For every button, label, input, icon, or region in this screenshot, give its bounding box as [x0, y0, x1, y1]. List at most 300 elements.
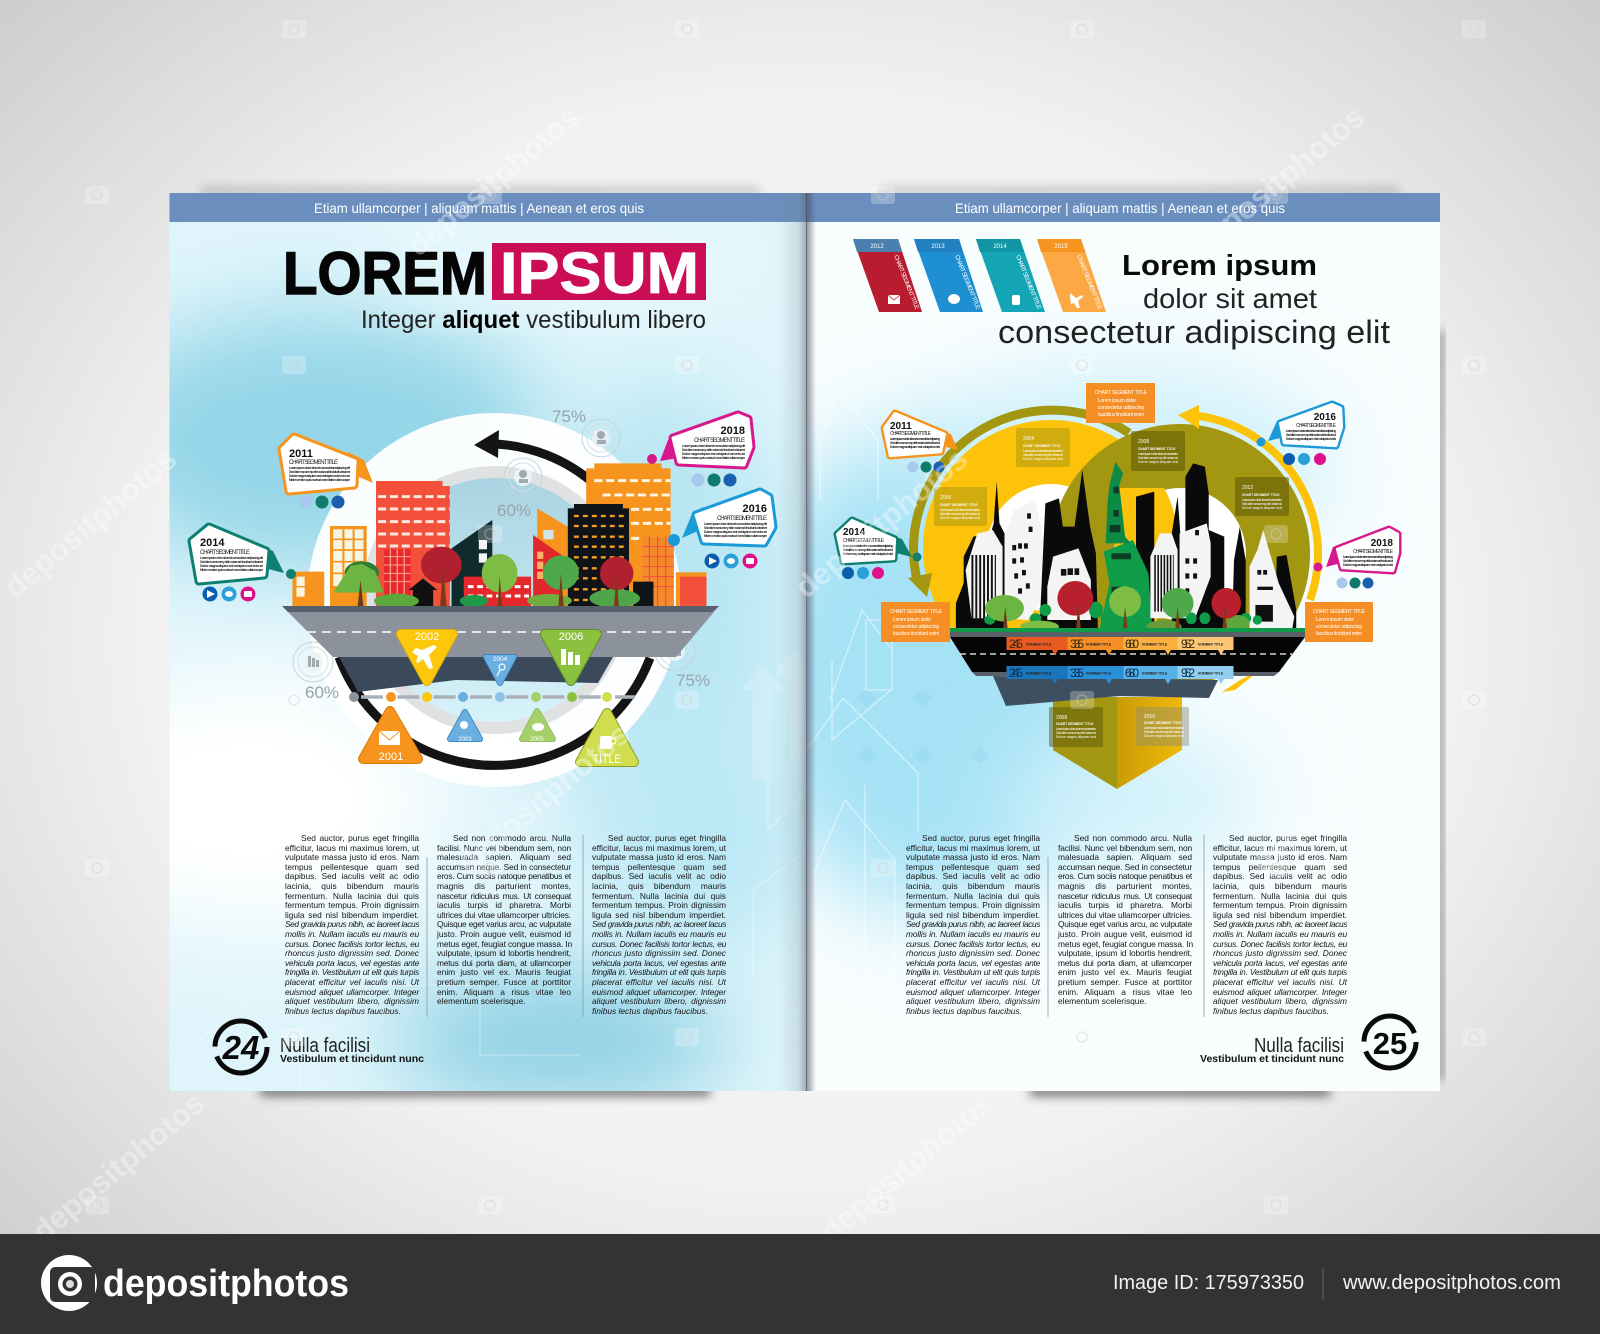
- box 2012: [1235, 477, 1289, 516]
- watermarks: depositphotos: [788, 441, 974, 605]
- spine shading: [778, 193, 816, 1091]
- number bar blue: 680: [1125, 666, 1139, 680]
- column 3: rhoncus justo dignissim sed. Donec: [1213, 948, 1347, 958]
- column 1: aliquet vestibulum libero, dignissim: [906, 996, 1040, 1006]
- tab 2012: [853, 239, 922, 312]
- right page heading: [998, 250, 1390, 350]
- orange box top: consectetur adipiscing: [1098, 405, 1144, 411]
- olive arrow arc: [908, 410, 1129, 597]
- column 2: ultrices dui vitae ullamcorper ultricies.: [437, 910, 571, 920]
- column 2: justo. Proin augue velit, euismod id: [437, 929, 571, 939]
- column 1: lacinia, quis bibendum mauris: [906, 881, 1040, 891]
- left infographic: city on circular timeline: [282, 407, 719, 787]
- column 3: mollis in. Nullam iaculis eu mauris eu: [592, 929, 726, 939]
- column 1: [906, 834, 1040, 1024]
- callout 2011 left: 2011: [289, 448, 313, 460]
- right page heading: dolor sit amet: [1143, 283, 1317, 314]
- box 2008 bottom: Sed diam nonummy nibh euismod: [1056, 731, 1096, 735]
- icons 2014 right: [842, 567, 884, 579]
- image id: Image ID: 175973350: [1113, 1272, 1304, 1294]
- callout 2014 right: CHART SEGMENT TITLE: [843, 538, 885, 544]
- orange box left: [881, 602, 950, 642]
- page number 25: [1364, 1016, 1416, 1068]
- percent labels: 60%: [497, 501, 531, 520]
- column 2: enim. Aliquam a risus vitae leo: [437, 986, 571, 996]
- box 2006: Sed diam nonummy nibh euismod: [940, 512, 980, 516]
- box 2010: Dolore magna aliquam erat: [1144, 734, 1184, 738]
- column 2: enim justo vel ex. Mauris feugiat: [1058, 967, 1192, 977]
- callout 2016 left: 2016: [743, 503, 767, 515]
- tab 2015: 2015: [1054, 244, 1068, 250]
- column 3: vulputate massa justo id eros. Nam: [592, 852, 726, 862]
- box 2004: Lorem ipsum dolor sit amet consectetur: [1023, 449, 1064, 453]
- column 3: cursus. Donec facilisis tortor lectus, eu: [1213, 939, 1347, 949]
- box 2008 bottom: CHART SEGMENT TITLE: [1056, 722, 1094, 726]
- number bar blue: [1006, 666, 1234, 684]
- box 2012: Sed diam nonummy nibh euismod: [1242, 502, 1282, 506]
- box 2004: CHART SEGMENT TITLE: [1023, 444, 1061, 448]
- callout 2016 left: [668, 492, 773, 546]
- column 3: efficitur, lacus mi maximus lorem, ut: [592, 843, 726, 853]
- column 1: placerat efficitur vel iaculis nisi. Ut: [906, 977, 1040, 987]
- footer text right: Nulla facilisi: [1254, 1035, 1344, 1057]
- callout 2016 right: Sed diam nonummy nibh euismod tincidunt ut: [1286, 433, 1337, 437]
- box 2012: Dolore magna aliquam erat: [1242, 506, 1282, 510]
- column 3: aliquet vestibulum libero, dignissim: [1213, 996, 1347, 1006]
- column 3: ligula sed nisl bibendum imperdiet.: [592, 910, 726, 920]
- callout 2011 right: 2011: [890, 421, 912, 432]
- column 3: finibus lectus dapibus faucibus.: [592, 1006, 708, 1016]
- callout 2011 right: Dolore magna aliquam erat volutpat ut wisi: [890, 445, 940, 449]
- column 3: fringilla in. Vestibulum ut elit quis turpis: [592, 967, 726, 977]
- marker title: TITLE: [592, 752, 622, 766]
- number bar blue: NUMBER TITLE: [1142, 672, 1168, 676]
- footer text right: Vestibulum et tincidunt nunc: [1200, 1053, 1344, 1065]
- column 2: vulputate, ipsum id lobortis hendrerit,: [1058, 948, 1192, 958]
- column 2: facilisi. Nunc vel bibendum sem, non: [1058, 843, 1192, 853]
- watermarks: depositphotos: [813, 1085, 999, 1249]
- callout 2018 left: CHART SEGMENT TITLE: [694, 438, 745, 444]
- header bar left: [170, 193, 807, 222]
- callout 2014 left: [192, 527, 296, 581]
- inner grey ring: [367, 472, 623, 728]
- column 1: fermentum tempus. Proin dignissim: [906, 900, 1040, 910]
- icons 2011 right: [908, 462, 944, 472]
- marker 2006: 2006: [559, 631, 583, 643]
- callout 2011 right: CHART SEGMENT TITLE: [890, 431, 932, 437]
- callout 2018 left: [647, 415, 751, 465]
- number bar orange: NUMBER TITLE: [1086, 642, 1112, 646]
- column 2: metus eget, feugiat congue massa. In: [437, 939, 572, 949]
- column 1: lacinia, quis bibendum mauris: [285, 881, 419, 891]
- callout 2011 right: [884, 413, 958, 456]
- icons 2011 left: [300, 496, 344, 508]
- column 3: fermentum. Nulla lacinia dui quis: [1213, 891, 1347, 901]
- road black: [950, 628, 1305, 676]
- marker 2005: 2005: [530, 737, 544, 743]
- page number 24: [215, 1021, 267, 1073]
- yellow ring overlap: [1114, 488, 1175, 622]
- column 3: ligula sed nisl bibendum imperdiet.: [1213, 910, 1347, 920]
- box 2004: 2004: [1023, 436, 1034, 442]
- box 2004: Sed diam nonummy nibh euismod: [1023, 453, 1063, 457]
- column 3: vehicula porta lacus, vel egestas ante: [1213, 958, 1347, 968]
- icons 2016 left: [704, 554, 758, 568]
- column 3: euismod aliquet ullamcorper. Integer: [1213, 986, 1347, 996]
- column 3: [592, 834, 726, 1024]
- column 1: mollis in. Nullam iaculis eu mauris eu: [906, 929, 1040, 939]
- column 2: [437, 834, 571, 1024]
- footer text right: [1200, 1035, 1344, 1065]
- tab 2013: [914, 239, 983, 312]
- column 3: fermentum. Nulla lacinia dui quis: [592, 891, 726, 901]
- column 2: iaculis turpis id pharetra. Morbi: [1058, 900, 1192, 910]
- callout 2016 left: Lorem ipsum dolor sit amet consectetur adipiscing elit: [704, 522, 768, 526]
- title: lorem ipsum: IPSUM: [500, 241, 699, 306]
- number bar orange: NUMBER TITLE: [1198, 642, 1224, 646]
- column 1: Sed auctor, purus eget fringilla: [301, 833, 419, 843]
- yellow arrow arc: [1178, 405, 1318, 692]
- callout 2014 left: Sed diam nonummy nibh euismod tincidunt ut laoreet: [200, 560, 264, 564]
- column 1: Sed gravida purus nibh, ac laoreet lacus: [906, 919, 1040, 929]
- box 2008 top: [1131, 431, 1185, 471]
- column 1: ligula sed nisl bibendum imperdiet.: [285, 910, 419, 920]
- orange box top: [1086, 383, 1155, 423]
- logo wordmark: depositphotos: [103, 1263, 349, 1305]
- trees: [335, 547, 640, 608]
- column 3: dapibus. Sed iaculis velit ac odio: [592, 871, 726, 881]
- column 1: finibus lectus dapibus faucibus.: [285, 1006, 401, 1016]
- box 2010: Lorem ipsum dolor sit amet consectetur: [1144, 726, 1185, 730]
- column 3: fermentum tempus. Proin dignissim: [592, 900, 726, 910]
- column 1: tempus pellentesque quam sed: [906, 862, 1040, 872]
- marker 2006: [545, 631, 597, 681]
- callout 2011 right: Sed diam nonummy nibh euismod tincidunt ut: [890, 441, 941, 445]
- box 2006: 2006: [940, 495, 951, 501]
- icons 2016 right: [1283, 453, 1326, 465]
- column 3: placerat efficitur vel iaculis nisi. Ut: [1213, 977, 1347, 987]
- column 1: dapibus. Sed iaculis velit ac odio: [906, 871, 1040, 881]
- number bar orange: 335: [1070, 637, 1084, 651]
- tab 2012: 2012: [870, 244, 884, 250]
- number bar orange: 680: [1125, 637, 1139, 651]
- ring holes: [985, 482, 1248, 622]
- logo mark: [41, 1255, 97, 1311]
- column 2: accumsan neque. Sed in consectetur: [437, 862, 571, 872]
- orange box right: CHART SEGMENT TITLE: [1313, 609, 1366, 615]
- column 3: Sed auctor, purus eget fringilla: [1229, 833, 1347, 843]
- column 3: fringilla in. Vestibulum ut elit quis turpis: [1213, 967, 1347, 977]
- title: lorem ipsum: [283, 240, 706, 307]
- callout 2018 left: Dolore magna aliquam erat volutpat ut wisi enim ad: [682, 452, 745, 456]
- callout 2018 right: Sed diam nonummy nibh euismod tincidunt ut: [1343, 559, 1394, 563]
- column 3: dapibus. Sed iaculis velit ac odio: [1213, 871, 1347, 881]
- tab 2012: CHART SEGMENT TITLE: [892, 255, 919, 311]
- column 1: efficitur, lacus mi maximus lorem, ut: [285, 843, 419, 853]
- orange box left: consectetur adipiscing: [893, 624, 939, 630]
- brochure drop shadows: [200, 187, 1444, 1096]
- column 1: rhoncus justo dignissim sed. Donec: [906, 948, 1040, 958]
- icons 2014 left: [202, 586, 256, 602]
- watermarks: depositphotos: [1185, 99, 1371, 263]
- percent labels: 75%: [676, 671, 710, 690]
- box 2008 top: CHART SEGMENT TITLE: [1138, 447, 1176, 451]
- box 2010: 2010: [1144, 714, 1155, 720]
- column 2: [1058, 834, 1192, 1024]
- column 3: vulputate massa justo id eros. Nam: [1213, 852, 1347, 862]
- column 1: fermentum. Nulla lacinia dui quis: [906, 891, 1040, 901]
- orange box right: Lorem ipsum dolor: [1316, 617, 1354, 623]
- column 1: placerat efficitur vel iaculis nisi. Ut: [285, 977, 419, 987]
- number bar blue: NUMBER TITLE: [1198, 672, 1224, 676]
- column 2: eros. Cum sociis natoque penatibus et: [437, 871, 571, 881]
- number bar orange: 245: [1009, 637, 1023, 651]
- orange box top: Lorem ipsum dolor: [1098, 398, 1136, 404]
- column 3: efficitur, lacus mi maximus lorem, ut: [1213, 843, 1347, 853]
- column 3: placerat efficitur vel iaculis nisi. Ut: [592, 977, 726, 987]
- callout 2016 right: CHART SEGMENT TITLE: [1296, 423, 1337, 429]
- callout 2018 left: 2018: [721, 425, 745, 437]
- box 2008 bottom: Dolore magna aliquam erat: [1056, 735, 1096, 739]
- callout 2018 right: [1314, 529, 1398, 572]
- column 1: vehicula porta lacus, vel egestas ante: [285, 958, 419, 968]
- concentric circle icons: [293, 419, 695, 682]
- marker 2001: 2001: [379, 751, 403, 763]
- callout 2018 right: CHART SEGMENT TITLE: [1353, 549, 1394, 555]
- column 2: justo. Proin augue velit, euismod id: [1058, 929, 1192, 939]
- box 2012: Lorem ipsum dolor sit amet consectetur: [1242, 498, 1283, 502]
- footer text left: [280, 1035, 424, 1065]
- marker 2004: [486, 656, 514, 683]
- right page: [807, 222, 1440, 1091]
- box 2010: [1136, 707, 1189, 746]
- tab 2015: [1037, 239, 1106, 312]
- orange box top: faucibus tincidunt enim: [1098, 412, 1144, 418]
- tab 2014: 2014: [993, 244, 1007, 250]
- percent labels: [305, 407, 710, 702]
- bottom pointer tab: [1053, 697, 1182, 789]
- skyline: [956, 462, 1296, 633]
- number bar blue: 245: [1009, 666, 1023, 680]
- title: lorem ipsum: LOREM: [283, 240, 487, 307]
- city buildings: [292, 463, 707, 606]
- column 2: facilisi. Nunc vel bibendum sem, non: [437, 843, 571, 853]
- column 2: vulputate, ipsum id lobortis hendrerit,: [437, 948, 571, 958]
- callout 2011 left: CHART SEGMENT TITLE: [289, 460, 338, 466]
- tab 2015: CHART SEGMENT TITLE: [1075, 255, 1102, 311]
- column 3: lacinia, quis bibendum mauris: [1213, 881, 1347, 891]
- column 3: vehicula porta lacus, vel egestas ante: [592, 958, 726, 968]
- column 2: nascetur ridiculus mus. Ut consequat: [1058, 891, 1192, 901]
- column 2: enim. Aliquam a risus vitae leo: [1058, 986, 1192, 996]
- box 2008 top: 2008: [1138, 439, 1149, 445]
- column 1: tempus pellentesque quam sed: [285, 862, 419, 872]
- tab 2014: [976, 239, 1045, 312]
- watermarks: depositphotos: [25, 1085, 211, 1249]
- callout 2018 left: Sed diam nonummy nibh euismod tincidunt ut laoreet: [682, 448, 746, 452]
- box 2008 bottom: 2008: [1056, 715, 1067, 721]
- header bar right: [807, 193, 1440, 222]
- column 1: ligula sed nisl bibendum imperdiet.: [906, 910, 1040, 920]
- timeline dots: [349, 692, 635, 702]
- callout 2018 right: Lorem ipsum dolor sit amet consectetur adipiscing: [1343, 555, 1393, 559]
- column 1: euismod aliquet ullamcorper. Integer: [906, 986, 1040, 996]
- orange box right: faucibus tincidunt enim: [1316, 631, 1362, 637]
- page number 25: 25: [1373, 1026, 1407, 1061]
- column 1: dapibus. Sed iaculis velit ac odio: [285, 871, 419, 881]
- callout 2016 right: Dolore magna aliquam erat volutpat ut wisi: [1286, 437, 1336, 441]
- column 2: metus eget, feugiat congue massa. In: [1058, 939, 1193, 949]
- tab 2014: CHART SEGMENT TITLE: [1014, 255, 1041, 311]
- marker 2005: [522, 711, 553, 743]
- column 2: Sed non commodo arcu. Nulla: [453, 833, 571, 843]
- column 2: accumsan neque. Sed in consectetur: [1058, 862, 1192, 872]
- column 2: iaculis turpis id pharetra. Morbi: [437, 900, 571, 910]
- watermarks: depositphotos: [400, 99, 586, 263]
- tab 2013: 2013: [931, 244, 945, 250]
- marker 2002: 2002: [415, 631, 439, 643]
- callout 2014 left: CHART SEGMENT TITLE: [200, 550, 250, 556]
- column 3: lacinia, quis bibendum mauris: [592, 881, 726, 891]
- column 1: vehicula porta lacus, vel egestas ante: [906, 958, 1040, 968]
- box 2008 top: Dolore magna aliquam erat: [1138, 460, 1178, 464]
- column 2: eros. Cum sociis natoque penatibus et: [1058, 871, 1192, 881]
- column 2: elementum scelerisque.: [1058, 996, 1146, 1006]
- callout 2018 left: Lorem ipsum dolor sit amet consectetur adipiscing elit: [682, 444, 746, 448]
- box 2006: Dolore magna aliquam erat: [940, 516, 980, 520]
- column 2: metus dui porta diam, at ullamcorper: [437, 958, 571, 968]
- column 3: finibus lectus dapibus faucibus.: [1213, 1006, 1329, 1016]
- callout 2014 right: Dolore magna aliquam erat volutpat ut wisi: [843, 552, 893, 556]
- column 2: elementum scelerisque.: [437, 996, 525, 1006]
- column 3: aliquet vestibulum libero, dignissim: [592, 996, 726, 1006]
- callout 2011 left: Minim veniam quis nostrud exerci tation ullamcorper: [289, 478, 351, 482]
- callout 2014 right: 2014: [843, 527, 866, 538]
- callout 2018 left: Minim veniam quis nostrud exerci tation ullamcorper: [682, 456, 746, 460]
- column 3: tempus pellentesque quam sed: [1213, 862, 1347, 872]
- watermarks: depositphotos: [450, 716, 636, 880]
- tab 2013: CHART SEGMENT TITLE: [953, 255, 980, 311]
- box 2006: [934, 487, 987, 526]
- callout 2011 left: Dolore magna aliquam erat volutpat ut wisi enim ad: [289, 474, 350, 478]
- subtitle: Integer aliquet vestibulum libero: [361, 306, 706, 334]
- footer text left: Nulla facilisi: [280, 1035, 370, 1057]
- marker 2003: 2003: [458, 737, 472, 743]
- left page: [170, 222, 807, 1091]
- callout 2016 left: Sed diam nonummy nibh euismod tincidunt ut laoreet: [704, 526, 768, 530]
- column 3: euismod aliquet ullamcorper. Integer: [592, 986, 726, 996]
- marker title: [580, 713, 634, 766]
- column 1: Sed gravida purus nibh, ac laoreet lacus: [285, 919, 419, 929]
- orange box right: consectetur adipiscing: [1316, 624, 1362, 630]
- callout 2014 left: Lorem ipsum dolor sit amet consectetur adipiscing elit: [200, 556, 264, 560]
- orange box top: CHART SEGMENT TITLE: [1095, 390, 1148, 396]
- callout 2011 left: Lorem ipsum dolor sit amet consectetur adipiscing elit: [289, 466, 351, 470]
- column 1: fringilla in. Vestibulum ut elit quis turpis: [285, 967, 419, 977]
- right infographic: interlocking rings and skyline: [881, 383, 1373, 789]
- page number 24: 24: [222, 1029, 259, 1066]
- column 1: fermentum. Nulla lacinia dui quis: [285, 891, 419, 901]
- column 2: Quisque eget varius arcu, ac vulputate: [437, 919, 571, 929]
- column 2: Sed non commodo arcu. Nulla: [1074, 833, 1192, 843]
- column 1: fermentum tempus. Proin dignissim: [285, 900, 419, 910]
- road: [282, 606, 719, 657]
- icons 2018 right: [1336, 578, 1374, 588]
- right page heading: Lorem ipsum: [1122, 250, 1317, 282]
- column 1: euismod aliquet ullamcorper. Integer: [285, 986, 419, 996]
- callout 2018 right: 2018: [1371, 538, 1393, 549]
- column 1: Sed auctor, purus eget fringilla: [922, 833, 1040, 843]
- column 1: finibus lectus dapibus faucibus.: [906, 1006, 1022, 1016]
- column 2: malesuada sapien. Aliquam sed: [1058, 852, 1192, 862]
- column 2: malesuada sapien. Aliquam sed: [437, 852, 571, 862]
- column 3: rhoncus justo dignissim sed. Donec: [592, 948, 726, 958]
- white ring: [307, 413, 681, 787]
- callout 2018 right: Dolore magna aliquam erat volutpat ut wisi: [1343, 563, 1393, 567]
- right page heading: consectetur adipiscing elit: [998, 314, 1390, 350]
- column 2: nascetur ridiculus mus. Ut consequat: [437, 891, 571, 901]
- site url: www.depositphotos.com: [1342, 1272, 1561, 1294]
- ribbon tabs: [853, 239, 1106, 312]
- column 1: efficitur, lacus mi maximus lorem, ut: [906, 843, 1040, 853]
- box 2012: 2012: [1242, 485, 1253, 491]
- callout 2016 left: Dolore magna aliquam erat volutpat ut wisi enim ad: [704, 530, 767, 534]
- callout 2014 left: Dolore magna aliquam erat volutpat ut wisi enim ad: [200, 564, 263, 568]
- header bar left: Etiam ullamcorper | aliquam mattis | Aenean et eros quis: [314, 200, 644, 216]
- slate slab: [993, 676, 1218, 706]
- orange box left: CHART SEGMENT TITLE: [890, 609, 943, 615]
- percent labels: 60%: [305, 683, 339, 702]
- column 3: Sed gravida purus nibh, ac laoreet lacus: [1213, 919, 1347, 929]
- box 2004: [1016, 428, 1070, 467]
- olive ring: [1082, 456, 1278, 652]
- column 1: fringilla in. Vestibulum ut elit quis turpis: [906, 967, 1040, 977]
- callout 2011 left: Sed diam nonummy nibh euismod tincidunt ut laoreet: [289, 470, 351, 474]
- callout 2016 right: 2016: [1314, 412, 1336, 423]
- box 2010: CHART SEGMENT TITLE: [1144, 721, 1182, 725]
- callout 2016 right: [1256, 404, 1342, 446]
- column 1: mollis in. Nullam iaculis eu mauris eu: [285, 929, 419, 939]
- marker 2004: 2004: [493, 656, 508, 663]
- callout 2014 right: Lorem ipsum dolor sit amet consectetur adipiscing: [843, 544, 893, 548]
- footer text left: Vestibulum et tincidunt nunc: [280, 1053, 424, 1065]
- number bar orange: NUMBER TITLE: [1142, 642, 1168, 646]
- watermarks: depositphotos: [0, 441, 183, 605]
- box 2008 bottom: [1049, 707, 1103, 747]
- orange box left: faucibus tincidunt enim: [893, 631, 939, 637]
- column 2: magnis dis parturient montes,: [1058, 881, 1192, 891]
- callout 2016 right: Lorem ipsum dolor sit amet consectetur adipiscing: [1286, 429, 1336, 433]
- callout 2014 left: 2014: [200, 537, 225, 549]
- column 1: cursus. Donec facilisis tortor lectus, eu: [906, 939, 1040, 949]
- marker 2002: [401, 631, 453, 681]
- orange box right: [1305, 602, 1373, 642]
- column 3: Sed gravida purus nibh, ac laoreet lacus: [592, 919, 726, 929]
- header bar right: Etiam ullamcorper | aliquam mattis | Aenean et eros quis: [955, 200, 1285, 216]
- number bar blue: NUMBER TITLE: [1086, 672, 1112, 676]
- black circular arrow top: [474, 430, 592, 482]
- box 2004: Dolore magna aliquam erat: [1023, 457, 1063, 461]
- callout 2014 right: [837, 520, 922, 562]
- box 2006: Lorem ipsum dolor sit amet consectetur: [940, 508, 981, 512]
- column 2: metus dui porta diam, at ullamcorper: [1058, 958, 1192, 968]
- column 2: magnis dis parturient montes,: [437, 881, 571, 891]
- column 2: pretium semper. Fusce at porttitor: [437, 977, 571, 987]
- column 2: ultrices dui vitae ullamcorper ultricies.: [1058, 910, 1192, 920]
- right page body text: [906, 834, 1347, 1024]
- box 2008 top: Lorem ipsum dolor sit amet consectetur: [1138, 452, 1179, 456]
- number bar blue: 335: [1070, 666, 1084, 680]
